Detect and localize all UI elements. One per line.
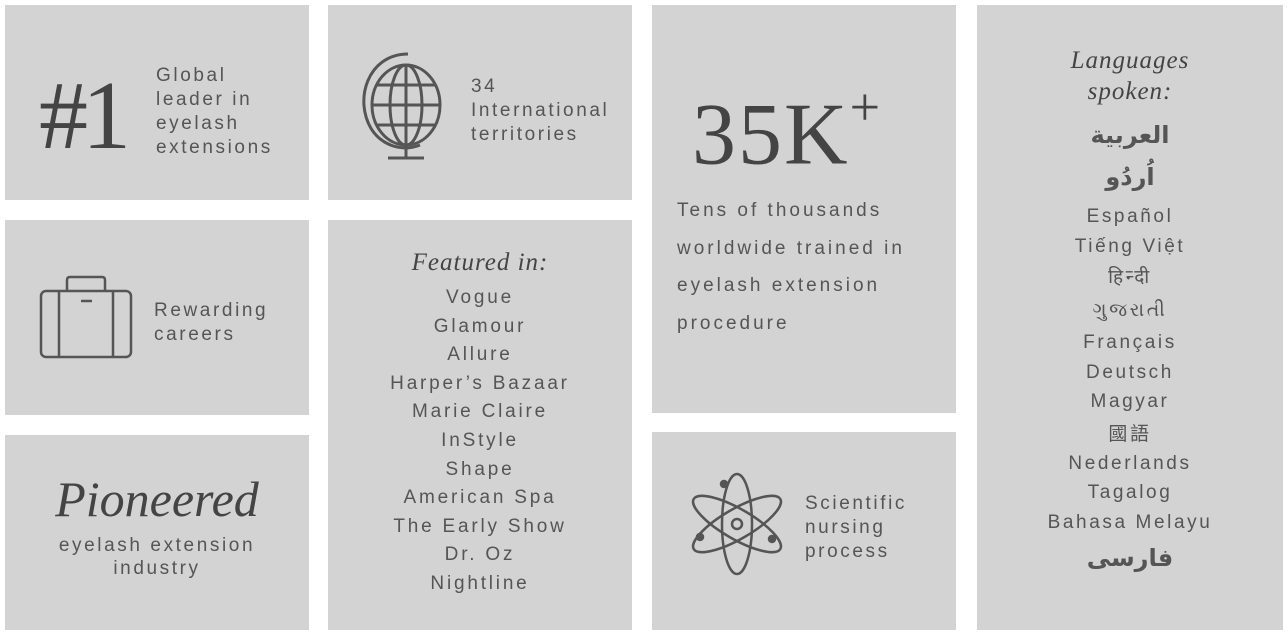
- text: global leader: Global: [156, 65, 227, 86]
- list: languages: Français: [1083, 332, 1177, 353]
- text: scientific nursing process: [805, 493, 907, 562]
- text: rewarding careers: [154, 300, 268, 345]
- panel: 35K+ trained: [652, 5, 956, 413]
- list: publications: Glamour: [434, 316, 526, 337]
- icon: suitcase: [40, 276, 132, 358]
- list: languages: Español: [1087, 206, 1173, 227]
- text: global leader: extensions: [156, 137, 273, 158]
- list: publications: American Spa: [404, 487, 556, 508]
- list: languages: Nederlands: [1068, 452, 1192, 474]
- heading: languages spoken: spoken:: [1088, 78, 1172, 105]
- heading: languages spoken: [1070, 47, 1189, 105]
- text: global leader: eyelash: [156, 113, 240, 134]
- list: languages: Tagalog: [1088, 482, 1172, 503]
- text: scientific nursing process: Scientific: [805, 493, 907, 514]
- big number 35K+: 35K+: [692, 77, 882, 183]
- list: publications: InStyle: [441, 430, 519, 451]
- text: eyelash extension industry: [59, 535, 255, 579]
- list: languages: हिन्दी: [1108, 266, 1152, 288]
- list: publications: Allure: [447, 344, 513, 365]
- list: publications: Marie Claire: [412, 401, 548, 422]
- text: 34 territories: 34: [471, 76, 497, 97]
- text: tens of thousands: [677, 200, 905, 334]
- list: languages: ગુજરાતી: [1093, 299, 1167, 321]
- text: rewarding careers: careers: [154, 324, 236, 345]
- list: languages: Tiếng Việt: [1075, 236, 1185, 256]
- list: languages: Bahasa Melayu: [1048, 512, 1212, 532]
- list: languages: 國語: [1108, 418, 1152, 446]
- list: languages: العربية: [1090, 122, 1170, 149]
- list: publications: The Early Show: [393, 516, 567, 537]
- text: rewarding careers: Rewarding: [154, 300, 268, 321]
- list: publications: Vogue: [446, 287, 514, 308]
- text: eyelash extension industry: industry: [113, 558, 201, 579]
- heading: Pioneered: Pioneered: [55, 471, 259, 527]
- text: 34 territories: territories: [471, 124, 579, 145]
- list: publications: Shape: [446, 459, 514, 480]
- text: eyelash extension industry: eyelash extension: [59, 535, 255, 556]
- panel: international territories: [328, 5, 632, 200]
- panel: pioneered: [5, 435, 309, 630]
- list: languages: Magyar: [1091, 391, 1169, 412]
- list: publications: Dr. Oz: [445, 544, 515, 565]
- heading: languages spoken: Languages: [1071, 47, 1189, 74]
- text: tens of thousands: Tens of thousands: [677, 200, 882, 221]
- text: scientific nursing process: nursing: [805, 517, 886, 538]
- list: publications: Nightline: [430, 573, 530, 594]
- text: 34 territories: International: [471, 100, 609, 121]
- list: publications: Harper’s Bazaar: [390, 373, 570, 394]
- text: tens of thousands: worldwide trained in: [677, 238, 905, 258]
- text: tens of thousands: procedure: [677, 312, 790, 334]
- panel: #1 global leader: [5, 5, 309, 200]
- list: languages: [1048, 122, 1212, 572]
- text: 34 territories: [471, 76, 609, 145]
- icon: atom: [692, 472, 782, 576]
- panel: languages: [977, 5, 1283, 630]
- text: tens of thousands: eyelash extension: [677, 275, 880, 296]
- list: languages: Deutsch: [1086, 362, 1174, 382]
- list: languages: اُردُو: [1105, 164, 1155, 191]
- text: global leader: leader in: [156, 89, 252, 110]
- panel: featured in: [328, 220, 632, 630]
- heading: featured in: Featured in:: [412, 249, 548, 276]
- list: publications: [390, 287, 570, 594]
- icon: globe: [362, 52, 442, 160]
- text: scientific nursing process: process: [805, 541, 890, 562]
- list: languages: فارسی: [1087, 545, 1173, 572]
- panel: rewarding careers: [5, 220, 309, 415]
- panel: scientific nursing: [652, 432, 956, 630]
- big number #1: #1: [39, 62, 125, 170]
- text: global leader: [156, 65, 273, 158]
